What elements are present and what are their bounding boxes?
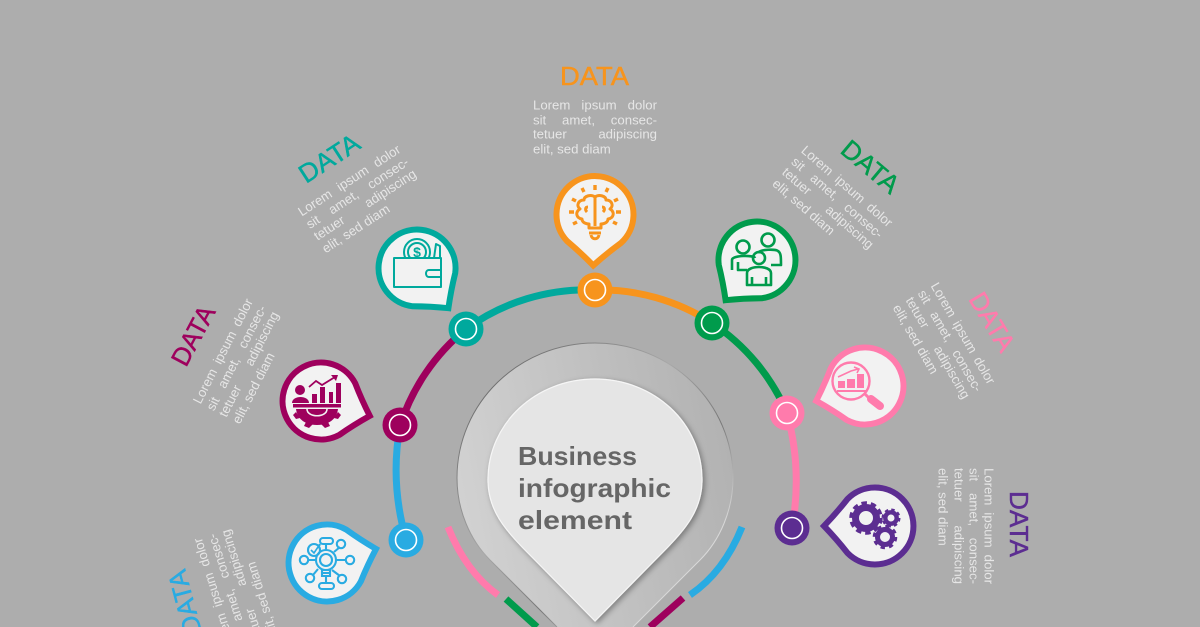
node: magenta — [382, 408, 418, 442]
text: orange block: tetuer adipiscing — [533, 127, 657, 142]
text: pink block: Lorem ipsum dolor — [928, 280, 998, 387]
center title: Business — [518, 441, 637, 471]
icon: people group — [732, 234, 781, 285]
text: pink block: sit amet, consec- — [915, 287, 986, 394]
text: purple block: Lorem ipsum dolor — [982, 468, 996, 584]
node: pink — [770, 396, 804, 430]
node: purple — [774, 510, 810, 546]
node: teal — [448, 312, 484, 346]
text: blue block — [190, 528, 281, 627]
node: blue — [388, 522, 424, 558]
text: teal block: elit, sed diam — [319, 201, 393, 256]
heading: teal DATA: DATA — [293, 127, 366, 189]
node: orange — [578, 272, 612, 308]
text: teal block: Lorem ipsum dolor — [295, 142, 403, 219]
icon: wallet with coin: $ — [413, 244, 421, 260]
text: green block: tetuer adipiscing — [779, 165, 876, 252]
text: purple block — [936, 468, 996, 584]
center outer teardrop — [457, 343, 733, 627]
pin: orange — [555, 175, 635, 267]
text: orange block: Lorem ipsum dolor — [533, 98, 657, 112]
text: pink block — [890, 280, 998, 402]
icon: wallet with coin — [394, 239, 441, 287]
text: teal block: sit amet, consec- — [303, 154, 411, 231]
text: green block: elit, sed diam — [769, 176, 838, 238]
icon: lightbulb brain — [569, 185, 621, 239]
text: magenta block: Lorem ipsum dolor — [190, 296, 256, 406]
node: green — [694, 306, 730, 340]
heading: magenta DATA: DATA — [165, 300, 222, 371]
heading: green DATA: DATA — [835, 134, 906, 200]
text: teal block: tetuer adipiscing — [311, 166, 419, 244]
text: magenta block: elit, sed diam — [229, 350, 278, 426]
icon: chart on gear with person — [292, 375, 341, 428]
text: green block: sit amet, consec- — [789, 154, 886, 241]
icon: idea network — [300, 538, 354, 589]
text: purple block: sit amet, consec- — [966, 468, 981, 584]
heading: pink DATA: DATA — [963, 287, 1022, 357]
heading: purple DATA: DATA — [1004, 491, 1034, 558]
icon: magnifier with chart — [832, 362, 880, 406]
pin: blue — [279, 512, 387, 611]
text: orange block — [533, 98, 657, 157]
text: pink block: elit, sed diam — [890, 302, 941, 377]
text: orange block: elit, sed diam — [533, 142, 611, 157]
timeline ring — [396, 290, 796, 627]
text: purple block: tetuer adipiscing — [951, 468, 966, 584]
center inner teardrop — [488, 379, 702, 621]
center title: infographic — [518, 473, 671, 503]
pin: magenta — [273, 353, 381, 453]
heading: orange DATA: DATA — [560, 61, 630, 91]
pin: green — [695, 206, 811, 324]
text: green block — [769, 143, 896, 252]
pin: teal — [363, 214, 479, 332]
center title — [518, 441, 671, 535]
text: magenta block: sit amet, consec- — [203, 303, 269, 413]
text: magenta block — [190, 296, 282, 426]
center title: element — [518, 505, 632, 535]
text: magenta block: tetuer adipiscing — [216, 309, 282, 419]
pin: pink — [805, 338, 913, 438]
text: teal block — [295, 142, 419, 256]
pin: purple — [824, 488, 913, 564]
text: purple block: elit, sed diam — [936, 468, 951, 546]
icon: gears — [851, 503, 899, 548]
text: orange block: sit amet, consec- — [533, 112, 657, 127]
text: green block: Lorem ipsum dolor — [798, 143, 896, 230]
text: pink block: tetuer adipiscing — [902, 294, 973, 402]
